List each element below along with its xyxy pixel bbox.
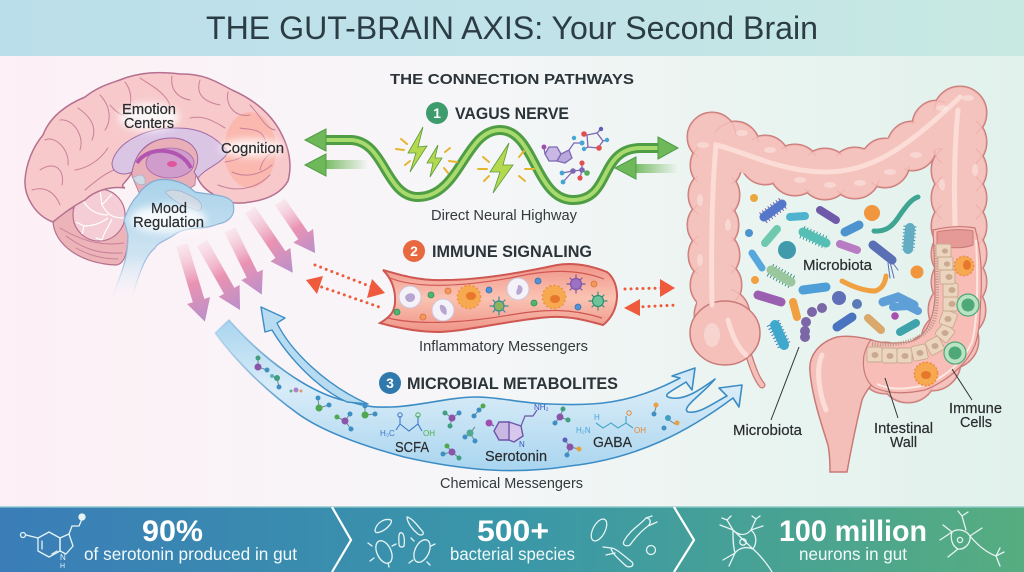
haustra folds [688, 87, 986, 402]
heading: immune signaling: IMMUNE SIGNALING [432, 242, 592, 261]
label: immune: Immune [949, 401, 1002, 417]
label: microbiota center: Microbiota [803, 258, 873, 274]
badge digit: 1 [433, 105, 441, 121]
round microbes [745, 194, 924, 342]
arrow: lower left fading [305, 154, 368, 176]
icon: serotonin molecule: H [60, 563, 65, 570]
brain illustration [25, 73, 290, 298]
colon fill [688, 87, 986, 402]
cerebrum [25, 73, 290, 222]
sparks [396, 139, 534, 181]
taenia band [712, 97, 960, 355]
SCFA structure: OH [423, 429, 435, 438]
arrowhead left [305, 129, 326, 151]
serotonin structure: N [519, 440, 525, 449]
GABA structure: OH [634, 426, 646, 435]
inner arc [137, 151, 191, 168]
white blood cells [399, 278, 529, 321]
epithelium cells [867, 244, 958, 363]
blood vessel [380, 264, 617, 332]
label glow [119, 103, 284, 233]
pineal [167, 161, 177, 167]
floating molecules [254, 356, 680, 460]
footer statistics band [0, 506, 1024, 572]
pathway 1: vagus nerve [305, 102, 678, 224]
orange immune cells [458, 286, 565, 308]
vessel wall inner lines [388, 271, 604, 322]
caption: inflammatory messengers: Inflammatory Messengers [419, 339, 588, 355]
serotonin structure [486, 403, 549, 449]
leader lines [771, 347, 972, 420]
label: mood: Mood [151, 201, 187, 217]
lumen opening [937, 230, 973, 248]
immune cell: orange top [955, 257, 973, 275]
pathway 3: microbial metabolites [215, 307, 742, 492]
microvilli [872, 245, 937, 345]
rectum highlight [819, 355, 826, 410]
badge digit: 3 [386, 375, 394, 391]
bristled bacteria [763, 203, 910, 347]
immune cell: orange bottom [915, 363, 937, 385]
stat text: neurons: neurons in gut [799, 544, 907, 564]
cutaway section [863, 227, 981, 393]
icon: bacteria right [588, 516, 657, 567]
main ribbon arrow [215, 320, 742, 471]
icon: serotonin molecule [20, 514, 85, 570]
cerebellum [53, 189, 128, 265]
cognition highlight [224, 112, 276, 188]
number badge 2 [403, 240, 425, 262]
small structures [133, 175, 202, 210]
number badge 1 [426, 102, 448, 124]
corpus callosum [112, 128, 228, 178]
thalamus [146, 148, 194, 178]
nerve wave [320, 130, 664, 200]
title: THE GUT-BRAIN AXIS: Your Second Brain [206, 10, 818, 46]
sulci lines [32, 76, 282, 205]
label: intestinal: Intestinal [874, 421, 933, 437]
brainstem [112, 180, 234, 298]
arrow: lower right fading [615, 157, 678, 179]
intestine illustration [688, 87, 1002, 472]
limbic area [132, 138, 199, 195]
stat: 100 million: 100 million [779, 515, 927, 548]
serotonin structure: NH₂ [534, 403, 549, 412]
colon outline [688, 87, 986, 402]
pathway 2: immune signaling [306, 240, 677, 355]
dotted arrows right [624, 279, 677, 316]
heading: microbial metabolites: MICROBIAL METABOLITES [407, 374, 618, 393]
stat text: bacterial species: bacterial species [450, 544, 575, 564]
stat: 90%: 90% [142, 515, 203, 548]
molecules [542, 127, 609, 184]
chevron dividers [332, 507, 694, 572]
arrowhead right [658, 137, 678, 159]
icon: bacteria left [368, 517, 435, 567]
dotted arrows left [306, 265, 385, 308]
label: SCFA: SCFA [395, 440, 429, 456]
label: cells: Cells [960, 415, 992, 431]
stat text: serotonin: of serotonin produced in gut [84, 544, 297, 564]
colon core [714, 113, 960, 310]
SCFA structure: H₃C [380, 429, 395, 438]
spiky pathogens [490, 275, 607, 315]
lightning bolts [408, 127, 513, 193]
icon: serotonin molecule: N [60, 553, 66, 562]
label: cognition: Cognition [221, 141, 284, 157]
badge digit: 2 [410, 243, 418, 259]
sigmoid and rectum [810, 336, 875, 472]
immune cell: green bottom [944, 342, 966, 364]
header band [0, 0, 1024, 56]
SCFA structure [380, 413, 435, 438]
GABA structure: H₂N [576, 426, 591, 435]
cutaway lining [877, 240, 977, 389]
label: regulation: Regulation [133, 215, 204, 231]
number badge 3 [379, 372, 401, 394]
GABA structure: H [594, 413, 600, 422]
lobe highlights [697, 95, 978, 347]
label: emotion centers: Emotion [122, 102, 176, 118]
label: wall: Wall [890, 435, 917, 451]
cell nuclei [872, 248, 956, 359]
label: serotonin: Serotonin [485, 449, 547, 465]
appendix [748, 353, 762, 385]
microbiota cluster [745, 194, 924, 347]
cecum [690, 301, 760, 365]
immune cell: green top [957, 294, 979, 316]
icon: neuron left [720, 516, 772, 572]
heading: connection pathways: THE CONNECTION PATHWAYS [390, 71, 634, 88]
branch arrow to brain [261, 307, 368, 404]
label: GABA: GABA [593, 435, 632, 451]
small particles [394, 278, 597, 320]
GABA structure [576, 411, 646, 435]
stat: 500+: 500+ [477, 515, 549, 548]
label: centers: Centers [124, 116, 174, 132]
caption: chemical messengers: Chemical Messengers [440, 476, 583, 492]
caption: direct neural highway: Direct Neural Highway [431, 208, 578, 224]
icon: neuron right [940, 511, 1004, 566]
arrows: brain to body signals [171, 195, 325, 325]
heading: vagus nerve: VAGUS NERVE [455, 104, 569, 123]
label: microbiota lower: Microbiota [733, 423, 803, 439]
